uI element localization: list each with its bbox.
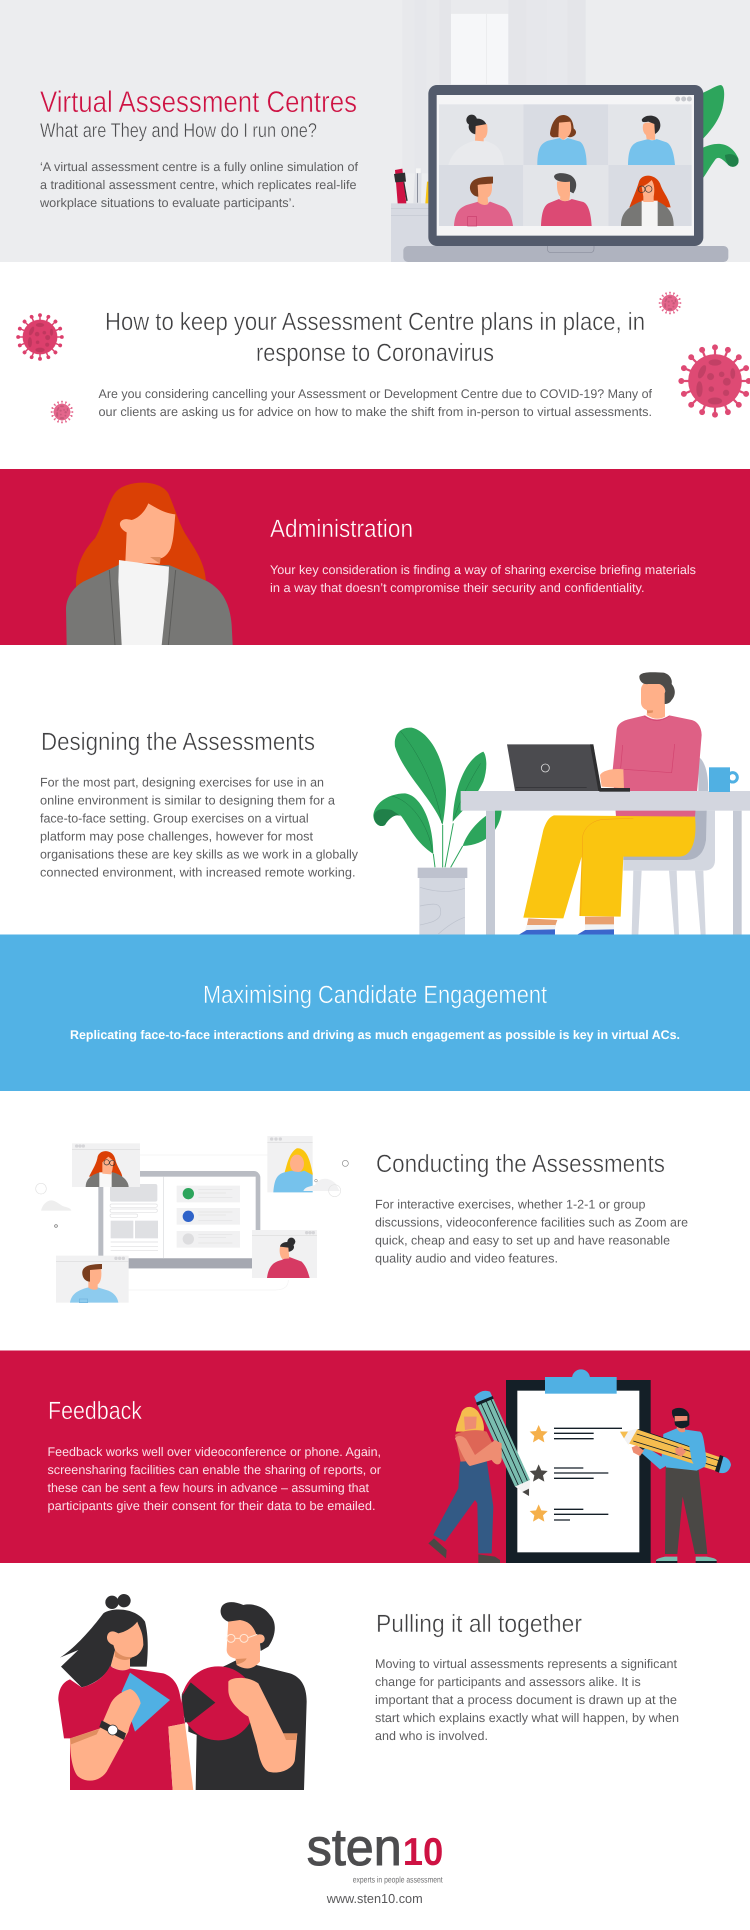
woman with green pencil [428,1391,530,1563]
footer logo: 10 [403,1831,443,1874]
text [375,1198,688,1266]
plant pot [418,868,467,935]
illustration: two colleagues with pie chart [58,1594,307,1790]
man with yellow pencil [620,1408,731,1563]
background decorations [36,1155,348,1290]
panel: feedback [0,1350,750,1563]
illustration: man at desk with plant [373,672,750,935]
hand on keyboard [600,769,624,788]
text [48,1445,381,1513]
section heading [105,308,645,367]
section text [98,387,653,419]
text [375,1657,679,1743]
rating rows [530,1425,622,1522]
text: connected environment, with increased remote working. [40,866,356,880]
virus icon small left [51,401,73,423]
panel: conducting the assessments [36,1136,688,1303]
text: face-to-face setting. Group exercises on a virtual [40,812,309,826]
participant 6 [621,176,674,226]
heading: Conducting the Assessments [376,1150,665,1178]
yellow trousers and shoes [518,815,696,935]
illustration: video conference windows [36,1136,348,1303]
section heading: How to keep your Assessment Centre plans in place, in [105,308,645,336]
text: Feedback works well over videoconference or phone. Again, [48,1445,381,1459]
text: online environment is similar to designing them for a [40,794,335,808]
section heading: response to Coronavirus [256,339,494,367]
text: For the most part, designing exercises for use in an [40,776,324,790]
panel: designing the assessments [40,672,750,935]
text: For interactive exercises, whether 1-2-1 or group [375,1198,646,1212]
heading: Administration [270,515,413,543]
panel: maximising candidate engagement [0,934,750,1091]
chair [623,757,715,935]
section text: Are you considering cancelling your Assessment or Development Centre due to COVID-19? Many of [98,387,653,401]
plant [373,728,502,867]
text: organisations these are key skills as we work in a globally [40,848,359,862]
laptop screen [428,85,703,246]
virus icon left [16,313,64,361]
participant 1 [448,115,504,165]
hero intro text: ‘A virtual assessment centre is a fully online simulation of [40,160,359,174]
text: these can be sent a few hours in advance – assuming that [48,1481,370,1495]
section text: our clients are asking us for advice on how to make the shift from in-person to virtual assessments. [98,405,652,419]
laptop [507,744,630,792]
text: screensharing facilities can enable the sharing of reports, or [48,1463,381,1477]
heading: Feedback [48,1397,142,1425]
window: man with blue top [56,1256,129,1303]
heading: Designing the Assessments [41,728,315,756]
heading: Pulling it all together [376,1610,582,1638]
curtains and window [402,0,586,173]
text: in a way that doesn’t compromise their security and confidentiality. [270,581,644,595]
hero illustration: video call on laptop [391,0,739,262]
text: Your key consideration is finding a way of sharing exercise briefing materials [270,563,696,577]
text: participants give their consent for their data to be emailed. [48,1499,376,1513]
panel: pulling it all together [58,1594,679,1790]
illustration: woman [66,483,233,645]
laptop with document and list [98,1171,260,1268]
table legs [486,811,495,935]
text: platform may pose challenges, however for most [40,830,314,844]
man arm [228,1678,297,1773]
participant 4 [454,177,513,226]
participant 3 [628,116,675,165]
text: quick, cheap and easy to set up and have reasonable [375,1234,670,1248]
laptop base [403,246,728,262]
text: start which explains exactly what will happen, by when [375,1711,679,1725]
footer logo [307,1819,443,1885]
text [40,776,359,880]
text: quality audio and video features. [375,1252,558,1266]
cloud and circles right [303,1179,341,1197]
website url: www.sten10.com [326,1891,423,1906]
wristwatch [99,1720,126,1740]
text [270,563,696,595]
plant leaves [702,85,739,180]
hero title: Virtual Assessment Centres [40,86,357,119]
mug [709,767,737,792]
desk top [461,791,750,811]
woman [58,1594,193,1790]
text: change for participants and assessors alike. It is [375,1675,641,1689]
window: woman with blonde hair [267,1136,313,1192]
window: woman with red hair [72,1143,140,1187]
heading: Maximising Candidate Engagement [203,981,547,1009]
hero panel [0,0,750,262]
illustration: clipboard and two people with pencils [428,1369,731,1563]
side table with pens [391,168,434,262]
panel: administration [0,469,750,645]
logo tagline: experts in people assessment [353,1875,443,1885]
participant 2 [537,115,587,165]
coronavirus section [16,292,750,423]
man [182,1602,307,1790]
window: woman with bun [252,1230,317,1278]
pie chart [181,1666,255,1740]
virus icon top right [659,292,681,314]
virus icon large right [678,344,750,418]
text: Replicating face-to-face interactions and driving as much engagement as possible is key in virtual ACs. [70,1028,680,1042]
text: discussions, videoconference facilities such as Zoom are [375,1216,688,1230]
footer logo: sten [307,1819,402,1877]
man head and torso [613,672,702,817]
participant 5 [541,173,592,226]
hero intro text: workplace situations to evaluate participants’. [39,196,295,210]
hero intro text [39,160,359,210]
text: important that a process document is drawn up at the [375,1693,677,1707]
hero subtitle: What are They and How do I run one? [40,120,317,142]
clipboard [506,1369,651,1563]
hero intro text: a traditional assessment centre, which replicates real-life [40,178,357,192]
text: Moving to virtual assessments represents a significant [375,1657,678,1671]
text: and who is involved. [375,1729,488,1743]
